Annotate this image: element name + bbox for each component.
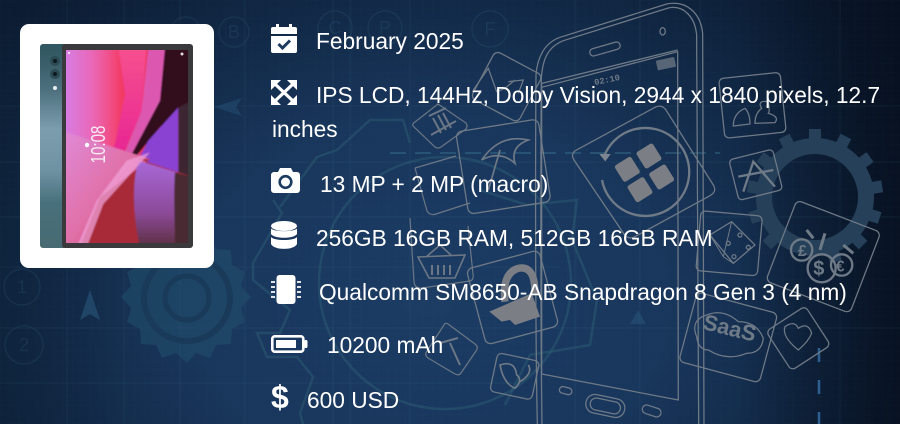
background: blueprint with phone and app tiles: 1 bbox=[17, 277, 27, 297]
dice tile bbox=[696, 211, 762, 276]
appstore tile bbox=[729, 149, 783, 200]
spec: camera bbox=[271, 168, 548, 197]
icon: calendar bbox=[271, 24, 297, 53]
text: 10200 mAh bbox=[327, 332, 443, 358]
phone and tiles, drawn in 3x coordinates: € bbox=[836, 259, 845, 276]
phone and tiles, drawn in 3x coordinates: $ bbox=[813, 258, 824, 280]
background: blueprint with phone and app tiles: 2 bbox=[19, 335, 29, 355]
icon: chip bbox=[271, 275, 301, 304]
people tile bbox=[719, 72, 786, 138]
text: 600 USD bbox=[307, 387, 399, 413]
spec: display bbox=[271, 80, 880, 142]
spec: battery bbox=[271, 332, 443, 358]
spec: price bbox=[271, 379, 399, 415]
text: 256GB 16GB RAM, 512GB 16GB RAM bbox=[316, 225, 712, 251]
left app tiles: bank, blank, basket, hammer bbox=[410, 104, 477, 375]
spec: chipset bbox=[271, 275, 847, 305]
icon: battery bbox=[271, 335, 308, 353]
big teal gear outline bbox=[253, 120, 597, 424]
tablet illustration: 10:08 bbox=[88, 126, 110, 164]
background: blueprint with phone and app tiles: C bbox=[328, 18, 342, 38]
lock tile bbox=[466, 250, 559, 345]
heart tile bbox=[766, 306, 831, 371]
phone and tiles, drawn in 3x coordinates: £ bbox=[798, 243, 807, 260]
tablet illustration bbox=[40, 44, 193, 248]
spec: release date bbox=[271, 24, 464, 54]
right gear bbox=[747, 129, 883, 264]
umbrella tile bbox=[456, 119, 551, 214]
background: blueprint with phone and app tiles: F bbox=[484, 19, 496, 39]
text: February 2025 bbox=[316, 28, 464, 54]
icon: expand arrows bbox=[271, 80, 297, 105]
spec: storage bbox=[271, 221, 712, 251]
icon: dollar sign: $ bbox=[271, 379, 289, 415]
icon: database bbox=[271, 221, 297, 249]
phone and tiles, drawn in 3x coordinates: 02:10 bbox=[593, 73, 621, 88]
SaaS tile bbox=[679, 292, 778, 383]
text: 13 MP + 2 MP (macro) bbox=[320, 171, 548, 197]
phone and tiles, drawn in 3x coordinates bbox=[456, 3, 881, 424]
background: blueprint with phone and app tiles: P bbox=[379, 18, 391, 38]
product image card bbox=[20, 24, 214, 268]
top-left chart tile bbox=[471, 51, 543, 123]
phone and tiles, drawn in 3x coordinates: SaaS bbox=[701, 309, 759, 347]
background: blueprint with phone and app tiles: B bbox=[228, 22, 240, 42]
icon: camera bbox=[271, 168, 300, 193]
money tile bbox=[766, 200, 881, 313]
text: IPS LCD, 144Hz, Dolby Vision, 2944 x 1840 pixels, 12.7 bbox=[316, 82, 880, 108]
text: inches bbox=[272, 116, 338, 142]
center tile bbox=[572, 106, 715, 238]
controller tile bbox=[490, 353, 540, 400]
left gear bbox=[121, 231, 251, 363]
text: Qualcomm SM8650-AB Snapdragon 8 Gen 3 (4 nm) bbox=[319, 279, 847, 305]
